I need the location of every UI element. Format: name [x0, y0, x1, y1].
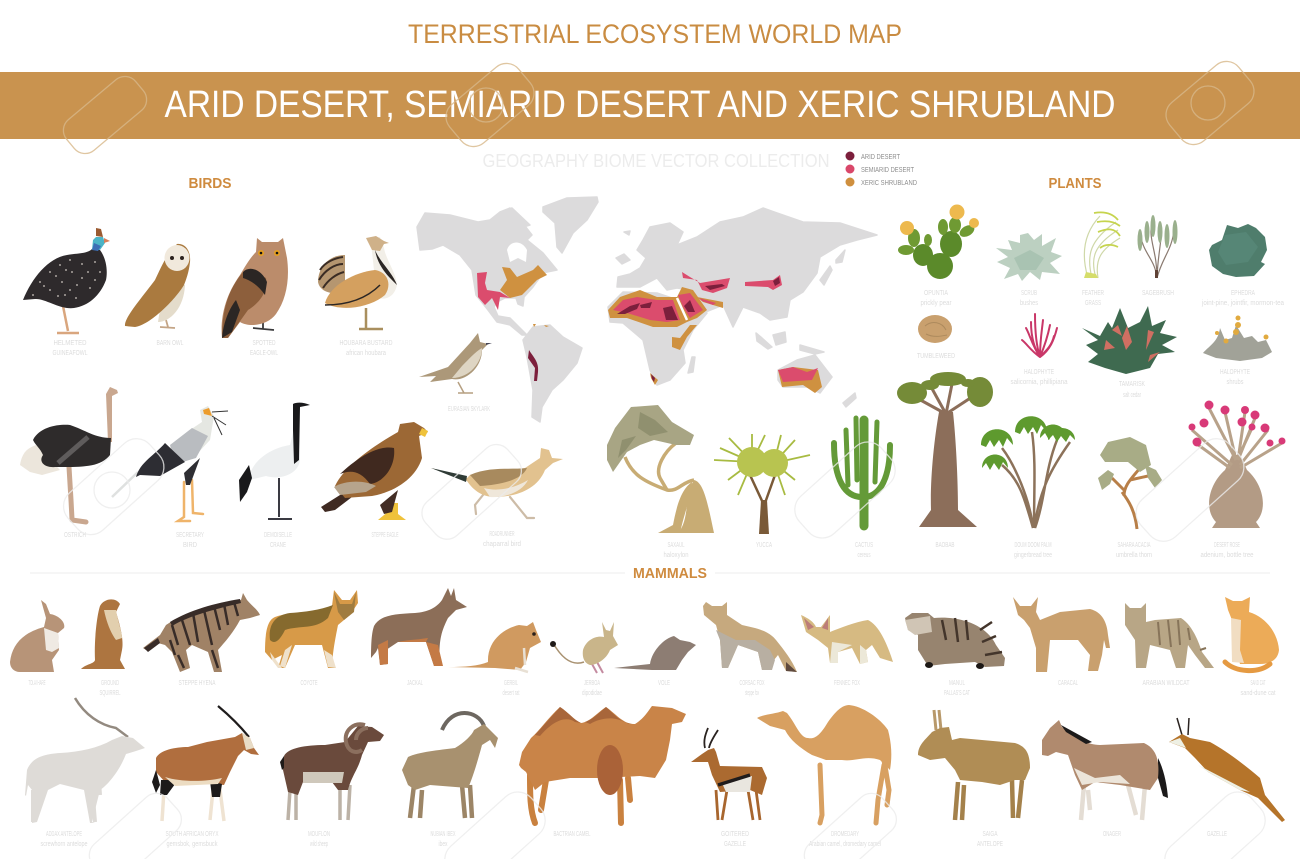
- mammal: goitered gazelle: GOITERED: [721, 831, 749, 838]
- map land masses: [417, 197, 877, 422]
- plant: halophyte grey: shrubs: [1226, 379, 1244, 386]
- mammal: jerboa: [550, 622, 618, 697]
- title banner: [0, 72, 1300, 139]
- mammal: corsac fox: CORSAC FOX: [740, 680, 765, 687]
- mammal: saiga antelope: [918, 710, 1030, 848]
- mammal: addax antelope: [25, 698, 145, 848]
- mammal: south african oryx: gemsbok, gemsbuck: [166, 841, 218, 848]
- mammal: gazelle leaping: GAZELLE: [1207, 831, 1227, 838]
- mammal: arabian wildcat: [1125, 603, 1214, 687]
- plant: sagebrush: [1138, 215, 1178, 297]
- mammal: gazelle leaping: [1169, 718, 1285, 838]
- bird: helmeted guineafowl: HELMETED: [54, 340, 86, 347]
- plant: halophyte red: HALOPHYTE: [1024, 369, 1054, 376]
- bird: houbara bustard: african houbara: [346, 350, 386, 357]
- plant: halophyte grey: [1203, 316, 1272, 386]
- mammal: gerbil: desert rat: [502, 690, 520, 697]
- mammal: sand cat: sand-dune cat: [1240, 690, 1276, 697]
- bird: demoiselle crane: DEMOISELLE: [264, 532, 292, 539]
- mammal: nubian ibex: NUBIAN IBEX: [430, 831, 456, 838]
- mammal: manul: MANUL: [949, 680, 965, 687]
- plant: tamarisk: salt cedar: [1123, 392, 1141, 399]
- bird: secretary bird: BIRD: [183, 542, 197, 549]
- plant: scrub bush: [996, 233, 1062, 307]
- plant: halophyte red: [1010, 314, 1068, 386]
- tree: desert rose: DESERT ROSE: [1214, 542, 1240, 549]
- tree: saxaul: SAXAUL: [668, 542, 685, 549]
- tree: desert rose: [1188, 400, 1286, 559]
- mammal: bactrian camel: BACTRIAN CAMEL: [554, 831, 591, 838]
- bird: houbara bustard: HOUBARA BUSTARD: [340, 340, 392, 347]
- plant: tumbleweed: [917, 315, 955, 360]
- biome: xeric shrubland: [500, 265, 822, 393]
- mammal: mouflon: MOUFLON: [308, 831, 330, 838]
- tree: cactus: cereus: [858, 552, 871, 559]
- bird: spotted eagle-owl: [222, 238, 288, 357]
- bird: roadrunner: [431, 448, 563, 548]
- tree: saxaul: [607, 405, 714, 559]
- mammal: tolai hare: [10, 600, 64, 687]
- tree: yucca: [714, 434, 810, 549]
- bird: steppe eagle: [321, 422, 428, 539]
- bird: steppe eagle: STEPPE EAGLE: [372, 532, 399, 539]
- mammal: fennec fox: FENNEC FOX: [834, 680, 860, 687]
- tree: sahara acacia: SAHARA ACACIA: [1118, 542, 1151, 549]
- mammal: manul: PALLAS'S CAT: [944, 690, 970, 697]
- bird: demoiselle crane: CRANE: [270, 542, 286, 549]
- mammal: caracal: CARACAL: [1058, 680, 1078, 687]
- plant: scrub bush: bushes: [1020, 300, 1038, 307]
- biome: semiarid desert: [477, 272, 818, 382]
- top heading: TERRESTRIAL ECOSYSTEM WORLD MAP: [408, 19, 902, 49]
- subtitle: GEOGRAPHY BIOME VECTOR COLLECTION: [482, 151, 830, 171]
- mammal: gerbil: [448, 622, 541, 697]
- mammal: nubian ibex: [402, 713, 498, 848]
- mammal: mouflon: wild sheep: [309, 841, 328, 848]
- plant: scrub bush: SCRUB: [1021, 290, 1037, 297]
- bird: helmeted guineafowl: [23, 228, 110, 357]
- mammal: saiga antelope: SAIGA: [982, 831, 998, 838]
- legend: SEMIARID DESERT: [861, 167, 915, 174]
- mammal: gerbil: GERBIL: [504, 680, 518, 687]
- plant: tamarisk: TAMARISK: [1119, 381, 1145, 388]
- mammal: jerboa: dipodidae: [582, 690, 602, 697]
- mammal: addax antelope: ADDAX ANTELOPE: [46, 831, 82, 838]
- tree: cactus: [834, 418, 890, 559]
- mammal: jackal: [371, 588, 467, 687]
- plants heading: PLANTS: [1048, 175, 1102, 192]
- plant: feather grass: FEATHER: [1082, 290, 1104, 297]
- bird: demoiselle crane: [239, 403, 310, 549]
- mammal: onager: ONAGER: [1103, 831, 1121, 838]
- legend: ARID DESERT: [861, 154, 901, 161]
- plant: tamarisk: [1082, 306, 1177, 399]
- mammal: coyote: COYOTE: [300, 680, 318, 687]
- mammal: south african oryx: SOUTH AFRICAN ORYX: [166, 831, 219, 838]
- biome: arid desert: [528, 277, 780, 382]
- mammal: corsac fox: steppe fox: [745, 690, 759, 697]
- mammal: jackal: JACKAL: [407, 680, 423, 687]
- mammal: steppe hyena: STEPPE HYENA: [178, 680, 216, 687]
- bird: barn owl: [125, 244, 190, 347]
- mammal: ground squirrel: GROUND: [101, 680, 119, 687]
- plant: ephedra: joint-pine, jointfir, mormon-tea: [1201, 300, 1284, 307]
- mammal: fennec fox: [801, 615, 893, 687]
- tree: desert rose: adenium, bottle tree: [1200, 552, 1254, 559]
- bird: helmeted guineafowl: GUINEAFOWL: [52, 350, 88, 357]
- plant: tumbleweed: TUMBLEWEED: [917, 353, 955, 360]
- birds heading: BIRDS: [188, 175, 232, 192]
- mammal: caracal: [1013, 597, 1110, 687]
- panel: mammals: [10, 588, 1285, 848]
- panel: plants: [607, 175, 1286, 559]
- mammals heading: MAMMALS: [633, 565, 707, 582]
- bird: secretary bird: SECRETARY: [176, 532, 204, 539]
- bird: eurasian skylark: EURASIAN SKYLARK: [448, 406, 490, 413]
- mammal: steppe hyena: [143, 593, 260, 687]
- mammal: dromedary camel: DROMEDARY: [831, 831, 859, 838]
- mammal: bactrian camel: [519, 706, 686, 838]
- mammal: onager: [1042, 720, 1168, 838]
- bird: barn owl: BARN OWL: [156, 340, 184, 347]
- mammal: goitered gazelle: [691, 728, 767, 848]
- Red Sea gap: [677, 298, 687, 320]
- plant: opuntia: [898, 204, 979, 307]
- mammal: manul: [905, 613, 1005, 697]
- plant: feather grass: [1082, 212, 1120, 307]
- Hudson Bay: [507, 242, 527, 262]
- plant: sagebrush: SAGEBRUSH: [1142, 290, 1174, 297]
- bird: secretary bird: [112, 406, 228, 549]
- plant: opuntia: prickly pear: [920, 300, 952, 307]
- tree: baobab: BAOBAB: [936, 542, 955, 549]
- mammal: mouflon: [280, 724, 384, 848]
- plant: halophyte grey: HALOPHYTE: [1220, 369, 1250, 376]
- mammal: addax antelope: screwhorn antelope: [40, 841, 88, 848]
- bird: houbara bustard: [318, 236, 397, 357]
- tree: sahara acacia: [1098, 437, 1162, 559]
- bird: spotted eagle-owl: EAGLE-OWL: [250, 350, 278, 357]
- legend: [846, 152, 917, 187]
- plant: ephedra: EPHEDRA: [1231, 290, 1255, 297]
- tree: doum palm: gingerbread tree: [1014, 552, 1052, 559]
- title banner: ARID DESERT, SEMIARID DESERT AND XERIC SHRUBLAND: [164, 84, 1116, 126]
- tree: doum palm: [981, 416, 1075, 559]
- bird: roadrunner: chaparral bird: [483, 541, 521, 548]
- mammal: ground squirrel: SQUIRREL: [100, 690, 121, 697]
- mammal: arabian wildcat: ARABIAN WILDCAT: [1142, 680, 1190, 687]
- tree: sahara acacia: umbrella thorn: [1116, 552, 1152, 559]
- bird: ostrich: [20, 387, 118, 539]
- mammal: sand cat: [1225, 597, 1279, 697]
- plant: feather grass: GRASS: [1085, 300, 1101, 307]
- legend: XERIC SHRUBLAND: [861, 180, 917, 187]
- mammal: south african oryx: [152, 706, 259, 848]
- bird: spotted eagle-owl: SPOTTED: [252, 340, 276, 347]
- mammal: sand cat: SAND CAT: [1250, 680, 1266, 687]
- tree: cactus: CACTUS: [855, 542, 873, 549]
- bird: roadrunner: ROADRUNNER: [490, 531, 514, 538]
- mammal: dromedary camel: Arabian camel, dromedary camel: [809, 841, 881, 848]
- mammal: coyote: [265, 590, 358, 687]
- mammal: nubian ibex: ibex: [438, 841, 448, 848]
- plant: opuntia: OPUNTIA: [924, 290, 948, 297]
- mammal: vole: VOLE: [658, 680, 670, 687]
- mammal: tolai hare: TOLAI HARE: [28, 680, 46, 687]
- mammal: vole: [614, 636, 696, 687]
- plant: halophyte red: salicornia, phillipiana: [1010, 379, 1068, 386]
- plant: ephedra: [1201, 224, 1284, 307]
- mammal: ground squirrel: [81, 599, 125, 697]
- tree: baobab: [897, 372, 993, 549]
- bird: eurasian skylark: [419, 333, 492, 413]
- panel: birds: [20, 175, 563, 549]
- bird: ostrich: OSTRICH: [64, 532, 86, 539]
- tree: yucca: YUCCA: [756, 542, 772, 549]
- tree: doum palm: DOUM DOOM PALM: [1014, 542, 1052, 549]
- mammal: saiga antelope: ANTELOPE: [977, 841, 1003, 848]
- mammal: corsac fox: [703, 602, 797, 697]
- mammal: goitered gazelle: GAZELLE: [724, 841, 746, 848]
- mammal: jerboa: JERBOA: [584, 680, 600, 687]
- world map: [417, 197, 877, 422]
- mammal: dromedary camel: [757, 705, 891, 848]
- tree: saxaul: haloxylon: [664, 552, 689, 559]
